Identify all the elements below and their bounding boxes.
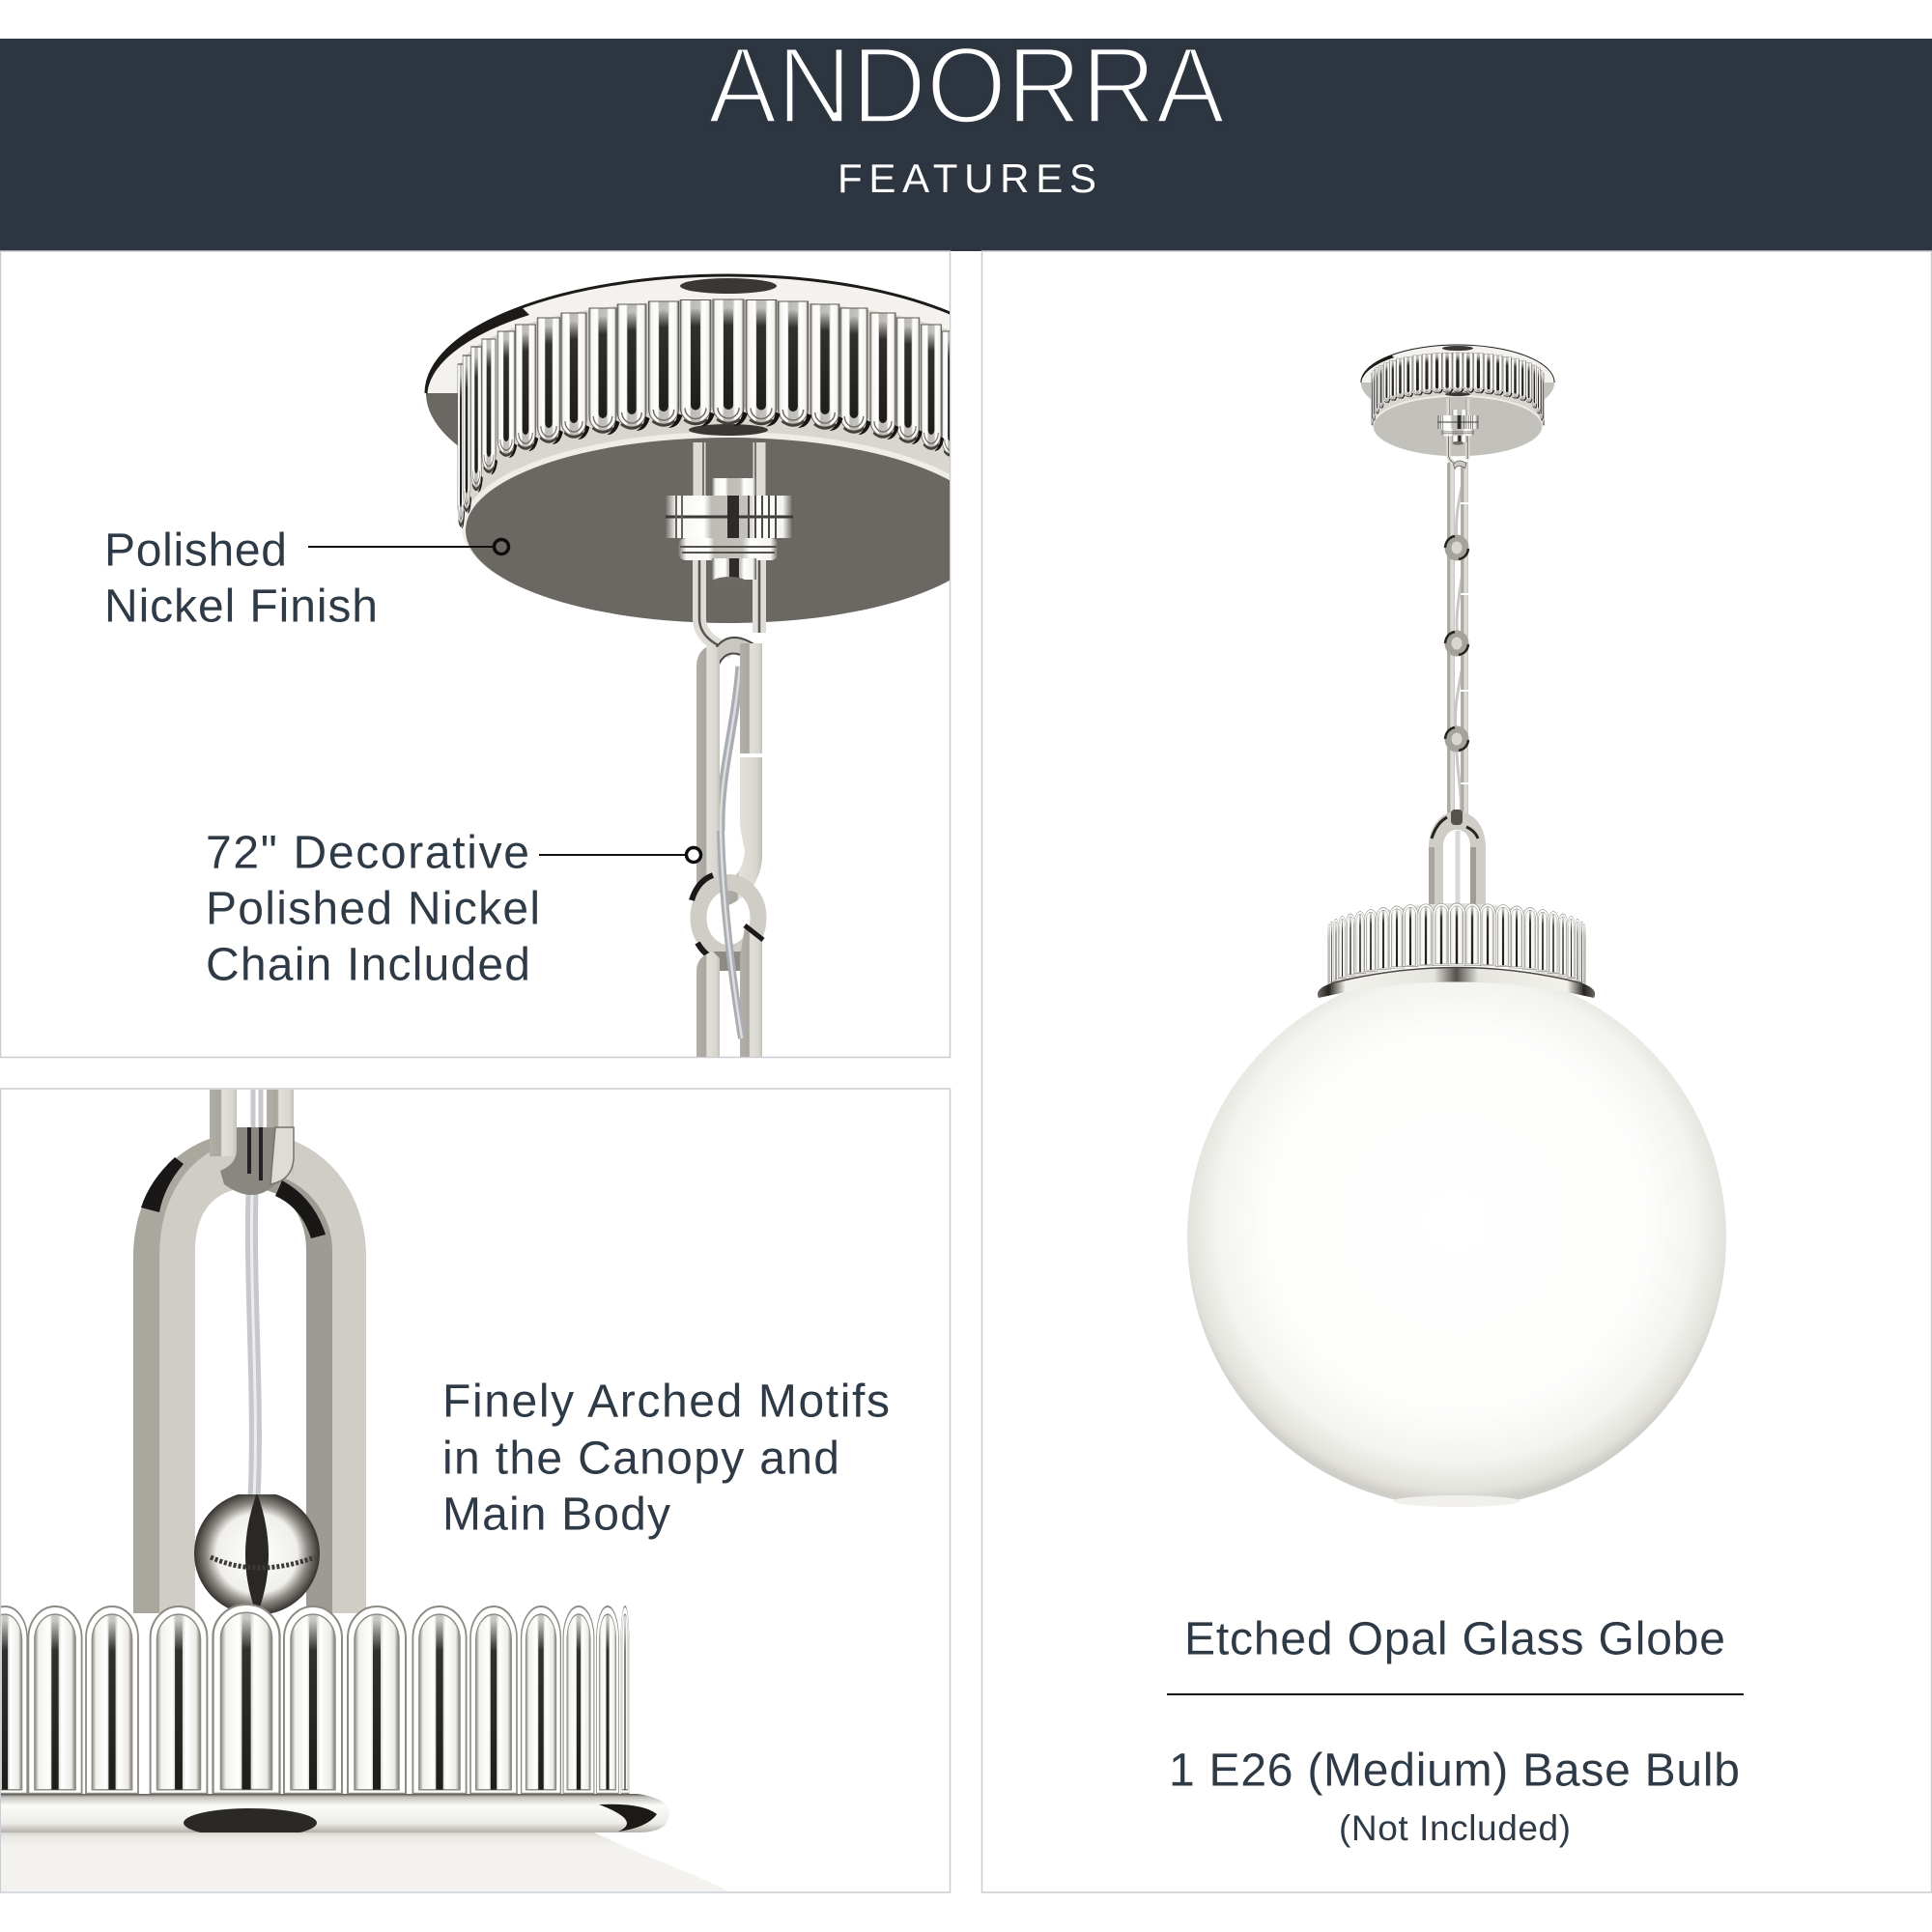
pendant light illustration <box>1187 345 1726 1507</box>
subtitle: FEATURES <box>838 156 1096 201</box>
icon: arched loop <box>1429 810 1486 913</box>
callout: polished nickel finish <box>104 526 508 632</box>
callout: globe and bulb specifications: (Not Included) <box>1339 1808 1571 1848</box>
header band <box>0 25 1932 251</box>
callout: decorative chain: Polished Nickel <box>206 883 540 935</box>
icon: rim <box>1318 968 1595 998</box>
callout: decorative chain: 72" Decorative <box>206 827 529 879</box>
panel: full fixture <box>981 251 1932 1892</box>
callout: polished nickel finish: Polished <box>104 526 287 576</box>
callout: arched motifs: Main Body <box>442 1490 670 1540</box>
callout: globe and bulb specifications: Etched Opal Glass Globe <box>1184 1613 1725 1665</box>
chain illustration <box>692 643 763 1058</box>
callout: decorative chain: Chain Included <box>206 939 530 991</box>
callout: globe and bulb specifications: 1 E26 (Medium) Base Bulb <box>1169 1745 1740 1797</box>
callout: arched motifs: in the Canopy and <box>442 1434 839 1484</box>
icon: canopy <box>1361 345 1554 469</box>
callout: decorative chain <box>206 827 701 991</box>
callout: polished nickel finish: Nickel Finish <box>104 582 378 632</box>
callout: globe and bulb specifications <box>1167 1613 1744 1848</box>
title: ANDORRA <box>708 25 1225 146</box>
icon: chain <box>1445 462 1468 815</box>
panel: canopy and chain detail <box>0 251 1031 1058</box>
callout: arched motifs: Finely Arched Motifs <box>442 1376 890 1428</box>
icon: fluted band <box>1327 903 1586 986</box>
callout: arched motifs <box>442 1376 890 1540</box>
panel: arched motif detail <box>0 1089 950 1892</box>
arched loop and body illustration <box>0 1089 730 1892</box>
icon: glass globe <box>1187 968 1726 1507</box>
canopy illustration <box>425 274 950 665</box>
